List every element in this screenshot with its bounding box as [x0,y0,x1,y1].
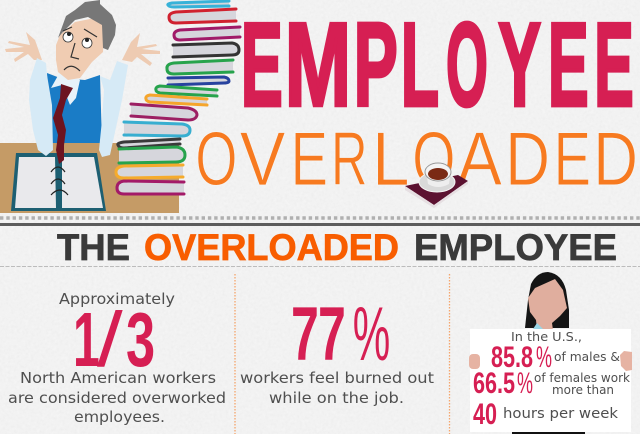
title: Employee: O [446,0,488,131]
tie [53,84,73,164]
right hand [620,351,632,371]
divider: solid rule [0,223,640,226]
panel: one third: / [97,297,123,383]
section heading: THE [57,227,130,268]
title: Employee: P [354,0,398,131]
eyes [63,32,73,42]
divider: column one [234,274,236,434]
right sleeve [99,61,128,157]
title: Overloaded: V [240,118,285,202]
sign text: In the U.S., [511,330,582,344]
woman hair [525,272,569,328]
white sign [470,329,631,432]
title: Overloaded: O [195,116,237,201]
panel: woman with sign: of females work [534,370,631,385]
panel: 77 percent: workers feel burned out [240,369,434,387]
illustration: stack of books [116,1,240,194]
title: Overloaded: D [505,116,550,201]
panel: woman with sign: % [536,341,552,374]
panel: one third: employees. [74,408,165,426]
panel: woman with sign: of males & [554,349,620,364]
panel: one third: 3 [126,296,155,382]
panel: one third: 1 [73,296,100,383]
collar [533,323,543,329]
illustration: coffee cup on book [405,163,468,208]
divider: dashed rule [0,266,640,268]
left hand [469,354,480,369]
head [56,17,104,80]
panel: woman with sign: 85.8 [491,341,533,374]
panel: woman with sign: % [517,367,533,400]
panel: one third: North American workers [20,369,216,387]
panel: one third: Approximately [59,290,175,308]
collar [51,70,80,105]
title: Overloaded: E [291,118,328,202]
title: Employee: Y [498,0,541,132]
panel: 77 percent: % [353,292,390,377]
title: Overloaded: A [457,117,502,202]
panel: woman with sign: more than [552,382,614,397]
panel: woman with sign: hours per week [503,406,619,422]
panel: 77 percent: while on the job. [269,389,404,407]
right hand [122,33,160,66]
panel: 77 percent: 7 [318,292,346,377]
title: Overloaded: D [593,116,638,201]
panel: woman with sign: 66.5 [473,367,515,400]
divider: column two [448,274,450,434]
title: Overloaded: E [554,118,591,202]
title: Employee: E [548,0,589,132]
title: Overloaded: L [372,117,410,202]
woman face [528,279,567,330]
title: Employee: E [594,0,634,131]
title: Employee: E [241,0,283,132]
skirt [512,432,585,434]
panel: one third [8,290,226,426]
title: Employee: M [285,0,351,131]
panel: 77 percent [240,292,434,407]
brows, nose and mouth [63,27,97,71]
illustration: open notebook [11,153,106,211]
title: Overloaded [195,116,638,202]
panel: one third: are considered overworked [8,389,226,407]
left sleeve [29,58,53,156]
section heading [57,227,617,268]
panel: 77 percent: 7 [291,292,319,377]
section heading: OVERLOADED [144,227,399,268]
panel: woman with sign [469,272,632,434]
title: Employee [241,0,634,132]
title: Overloaded: R [331,117,368,201]
hair [58,0,116,50]
illustration: desk [0,143,179,213]
title: Employee: L [401,0,439,132]
illustration: worried man [5,0,160,164]
vest [47,73,102,143]
section heading: EMPLOYEE [414,227,617,268]
left hand [5,32,42,62]
divider: dotted band [0,216,640,220]
title: Overloaded: O [412,118,455,202]
panel: woman with sign: 40 [473,398,497,431]
